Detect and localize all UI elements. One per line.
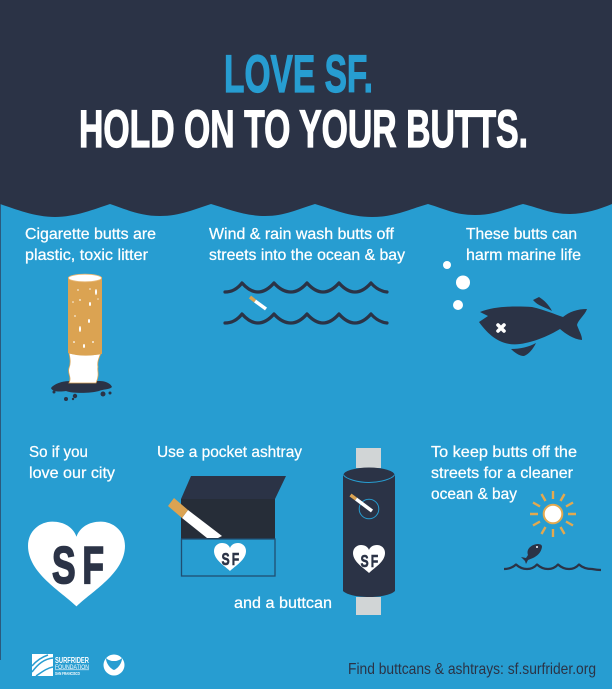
icon: sun — [530, 491, 576, 537]
logo: surfrider foundation: FOUNDATION — [55, 665, 89, 671]
icon: buttcan — [343, 448, 395, 615]
text: to keep butts off: To keep butts off the — [431, 444, 577, 461]
text: wind and rain: streets into the ocean & bay — [209, 247, 405, 264]
text: cigarette butts are plastic: Cigarette butts are — [25, 226, 156, 243]
text: these butts: harm marine life — [466, 247, 581, 264]
text: so if you love our city — [29, 444, 115, 482]
header wave band — [0, 0, 612, 217]
title: LOVE SF. — [224, 45, 373, 104]
icon: pocket ashtray — [168, 476, 286, 576]
icon: waves with cigarette — [225, 283, 387, 323]
text: use a pocket ashtray: Use a pocket ashtray — [157, 444, 302, 461]
text: so if you love our city: love our city — [29, 465, 115, 482]
icon: jumping fish — [521, 544, 542, 564]
text: wind and rain — [209, 226, 405, 264]
icon: buttcan: SF — [360, 552, 380, 572]
text: and a buttcan: and a buttcan — [234, 595, 332, 612]
logo: NOAA — [104, 654, 124, 676]
text: these butts: These butts can — [466, 226, 577, 243]
icon: cigarette butt — [51, 274, 112, 401]
icon: SF heart: SF — [52, 537, 111, 595]
text: to keep butts off: ocean & bay — [431, 486, 517, 503]
icon: bubbles — [443, 261, 470, 310]
text: to keep butts off: streets for a cleaner — [431, 465, 574, 482]
logo: surfrider foundation: SURFRIDER — [55, 656, 89, 665]
icon: pocket ashtray: SF — [222, 550, 241, 570]
title — [79, 45, 528, 159]
text: to keep butts off — [431, 444, 577, 503]
logo: surfrider foundation — [32, 654, 89, 676]
logo: surfrider foundation: SAN FRANCISCO — [55, 671, 80, 676]
text: these butts — [466, 226, 581, 264]
icon: small wave — [504, 564, 601, 570]
text: cigarette butts are plastic — [25, 226, 156, 264]
text: wind and rain: Wind & rain wash butts off — [209, 226, 395, 243]
text: so if you love our city: So if you — [29, 444, 88, 461]
icon: SF heart — [28, 522, 125, 606]
text: cigarette butts are plastic: plastic, toxic litter — [25, 247, 149, 264]
icon: dead fish — [479, 297, 587, 356]
